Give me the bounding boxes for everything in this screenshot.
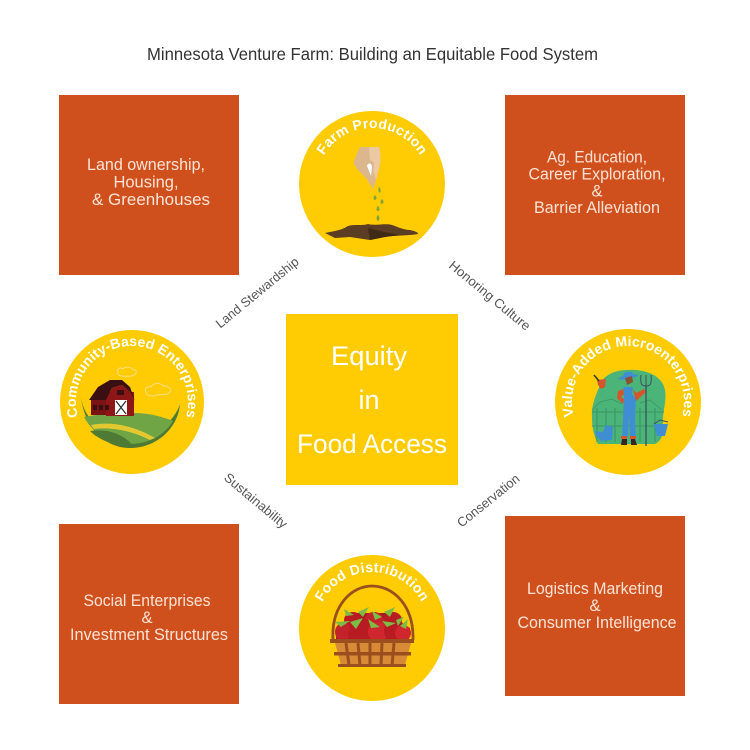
label: honoring culture: Honoring Culture <box>446 258 534 333</box>
icon: hand dropping seeds <box>325 147 418 240</box>
label: sustainability: Sustainability <box>221 470 291 532</box>
panel: land ownership: & Greenhouses <box>92 191 210 209</box>
panel: social enterprises: & <box>141 609 153 627</box>
panel: education: Career Exploration, <box>528 166 666 184</box>
panel: equity center: Food Access <box>297 429 447 459</box>
panel: logistics: & <box>589 597 601 615</box>
circle: food distribution <box>299 555 445 701</box>
panel: land ownership: Housing, <box>113 174 179 192</box>
panel: education: Ag. Education, <box>547 148 647 166</box>
circle: farm production <box>299 111 445 257</box>
panel: equity center <box>286 314 458 485</box>
label: conservation: Conservation <box>454 471 522 530</box>
panel: land ownership: Land ownership, <box>87 156 205 174</box>
label: land stewardship: Land Stewardship <box>213 254 302 331</box>
panel: land ownership <box>59 95 239 275</box>
icon: farmer with pitchfork <box>592 370 668 446</box>
panel: logistics: Consumer Intelligence <box>518 614 676 632</box>
heading: community-based enterprises: Community-Based Enterprises <box>67 338 198 418</box>
title: Minnesota Venture Farm: Building an Equitable Food System <box>147 44 598 64</box>
panel: social enterprises <box>59 524 239 704</box>
heading: food distribution: Food Distribution <box>314 562 427 602</box>
panel: equity center: in <box>358 385 380 415</box>
icon: basket of apples <box>330 586 414 667</box>
panel: equity center: Equity <box>331 341 408 371</box>
icon: barn on hill <box>81 367 180 448</box>
panel: social enterprises: Social Enterprises <box>84 592 210 610</box>
heading: farm production: Farm Production <box>316 119 426 155</box>
panel: logistics: Logistics Marketing <box>527 580 663 598</box>
panel: logistics <box>505 516 685 696</box>
panel: education: Barrier Alleviation <box>534 199 660 217</box>
panel: education <box>505 95 685 275</box>
circle: value-added microenterprises <box>555 329 701 475</box>
circle: community-based enterprises <box>60 330 204 474</box>
panel: social enterprises: Investment Structures <box>70 626 228 644</box>
panel: education: & <box>591 182 603 200</box>
heading: value-added microenterprises: Value-Added Microenterprises <box>562 336 693 418</box>
